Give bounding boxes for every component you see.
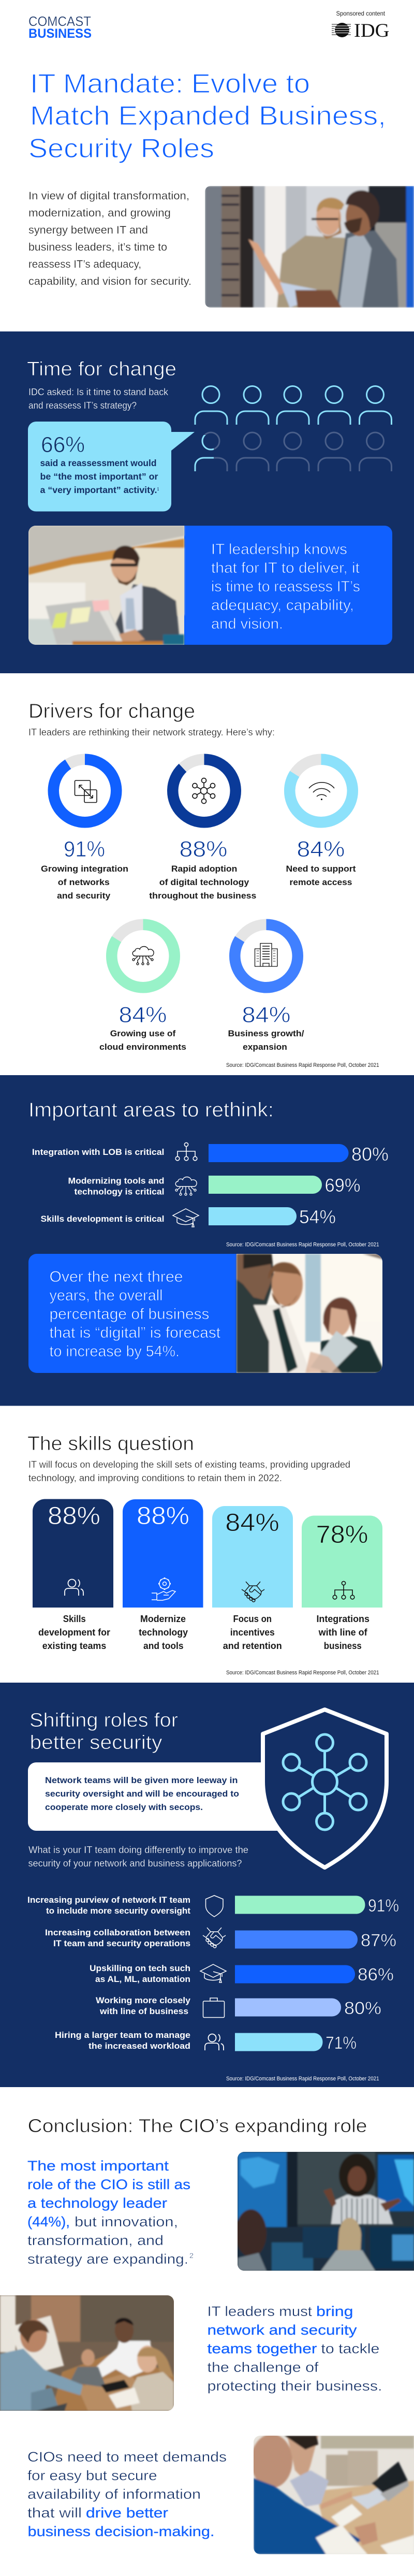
- bar row: skills: [40, 1206, 336, 1227]
- column: 78% integrations: 78%: [316, 1521, 368, 1549]
- donut: 84% cloud: [99, 924, 186, 1052]
- bar row: modernizing tools: technology is critical: [75, 1188, 165, 1197]
- title: Match Expanded Business,: [30, 101, 386, 131]
- column: 88% skills development: development for: [38, 1627, 110, 1638]
- photo: team handshake at meeting: [0, 2295, 174, 2411]
- banner text: is time to reassess IT’s: [211, 578, 360, 595]
- text block: bring teams together: teams together: [207, 2341, 317, 2356]
- column: 88% modernize: Modernize: [140, 1614, 186, 1624]
- callout: 66%: said a reassessment would: [40, 458, 156, 468]
- value: 84%: [119, 1003, 167, 1027]
- column: 84% incentives: incentives: [230, 1627, 275, 1638]
- icon: handshake: [242, 1582, 264, 1602]
- icon: cloud network: [132, 947, 154, 965]
- bar row: 91%: [27, 1895, 399, 1917]
- subheading: IT will focus on developing the skill sets of existing teams, providing upgraded: [28, 1459, 350, 1470]
- text block: bring teams together: the challenge of: [207, 2360, 319, 2375]
- callout: 66%: a “very important” activity.: [40, 485, 157, 495]
- text block: meet demands: availability of information: [27, 2486, 201, 2502]
- section: Conclusion: [0, 2115, 414, 2554]
- text block: CIO role: [27, 2158, 194, 2267]
- title: [28, 69, 386, 164]
- callout text box: security oversight and will be encouraged to: [45, 1789, 239, 1799]
- icon: org chart: [333, 1581, 354, 1599]
- column: 88% skills development: existing teams: [42, 1641, 106, 1651]
- bar row: 87%: IT team and security operations: [53, 1939, 190, 1948]
- header: [28, 10, 389, 41]
- bar row: LOB integration: 80%: [351, 1144, 389, 1165]
- icon: graduation cap: [200, 1964, 226, 1982]
- column: 78% integrations: with line of: [318, 1627, 368, 1638]
- label: [149, 864, 256, 901]
- icon: shield with network: [263, 1710, 387, 1868]
- column: 88% modernize: [123, 1499, 203, 1651]
- banner text: adequacy, capability,: [211, 597, 354, 614]
- banner text: and vision.: [211, 616, 283, 632]
- intro text: reassess IT’s adequacy,: [28, 258, 141, 270]
- donut: 91% integration: [41, 759, 128, 901]
- icon: handshake: [203, 1928, 226, 1948]
- bar row: 71%: 71%: [326, 2033, 357, 2053]
- photo: man at laptop: [28, 526, 184, 645]
- banner text: IT leadership knows: [211, 541, 347, 558]
- section: Shifting roles for better security: [0, 1683, 414, 2087]
- text block: CIO role: The most important: [27, 2158, 169, 2174]
- heading: The skills question: [27, 1433, 194, 1455]
- callout text box: cooperate more closely with secops.: [45, 1803, 203, 1812]
- text block: meet demands: CIOs need to meet demands: [27, 2449, 227, 2465]
- question text: What is your IT team doing differently to improve the: [28, 1845, 248, 1855]
- text block: CIO role: (44%),: [27, 2214, 70, 2230]
- text block: CIO role: a technology leader: [27, 2195, 167, 2211]
- column: 78% integrations: business: [324, 1641, 362, 1651]
- label: Growing use of: [110, 1029, 176, 1038]
- icon: briefcase: [203, 1998, 225, 2018]
- source note: Source: IDG/Comcast Business Rapid Response Poll, October 2021: [226, 2076, 379, 2082]
- text block: meet demands: business decision-making.: [28, 2524, 214, 2539]
- bar row: modernizing tools: [68, 1175, 360, 1197]
- icon: shield: [206, 1895, 223, 1917]
- bar row: 91%: 91%: [368, 1896, 399, 1916]
- bar row: 86%: Upskilling on tech such: [90, 1964, 190, 1973]
- column: 88% skills development: Skills: [63, 1614, 86, 1624]
- logo: IDG: IDG: [354, 20, 389, 41]
- intro text: modernization, and growing: [28, 207, 171, 219]
- blue banner with photo: [28, 1254, 382, 1373]
- label: throughout the business: [149, 891, 256, 901]
- label: Need to support: [286, 864, 356, 874]
- callout text box: Network teams will be given more leeway in: [45, 1776, 238, 1785]
- column: 78% integrations: Integrations: [316, 1614, 369, 1624]
- column: 84% incentives: [212, 1506, 293, 1651]
- question text: security of your network and business applications?: [28, 1858, 242, 1869]
- column: 88% skills development: 88%: [48, 1502, 100, 1530]
- navy background: [0, 1683, 414, 2087]
- label: of networks: [58, 878, 110, 887]
- callout: 66%: 66%: [41, 432, 85, 457]
- title: Security Roles: [28, 134, 214, 164]
- label: expansion: [243, 1043, 287, 1052]
- donut: 88% digital technology: [149, 759, 256, 901]
- section: Important areas to rethink: [0, 1075, 414, 1406]
- text block: bring teams together: network and security: [207, 2322, 357, 2338]
- heading: Important areas to rethink:: [28, 1099, 274, 1121]
- banner text: [211, 541, 360, 632]
- banner text: [50, 1268, 221, 1360]
- intro text: [28, 190, 191, 287]
- bar row: 87%: Increasing collaboration between: [45, 1928, 190, 1937]
- text block: CIO role: but innovation,: [75, 2214, 178, 2230]
- question text: and reassess IT’s strategy?: [28, 400, 137, 411]
- photo: two engineers at server rack: [205, 186, 414, 308]
- heading: Shifting roles for: [29, 1710, 178, 1731]
- navy background: [0, 331, 414, 673]
- value: 84%: [297, 837, 345, 862]
- bar row: 87%: 87%: [361, 1931, 396, 1950]
- bar row: 87%: [45, 1928, 396, 1950]
- text block: meet demands: [27, 2449, 227, 2539]
- label: [99, 1029, 186, 1052]
- callout: 66%: be “the most important” or: [40, 471, 158, 482]
- bar row: 80%: [96, 1996, 381, 2018]
- blue banner with photo: [28, 526, 392, 645]
- bar row: LOB integration: Integration with LOB is critical: [32, 1148, 165, 1157]
- donut: 84% remote access: [286, 759, 356, 887]
- icon: org chart: [175, 1142, 197, 1161]
- subheading: [28, 1459, 350, 1483]
- column: 88% modernize: and tools: [143, 1641, 184, 1651]
- banner text: percentage of business: [50, 1306, 209, 1323]
- bar row: 86%: as AL, ML, automation: [95, 1975, 190, 1984]
- icon: graduation cap: [173, 1209, 199, 1227]
- subheading: IT leaders are rethinking their network strategy. Here’s why:: [28, 727, 275, 737]
- label: and security: [57, 891, 111, 901]
- icon: cloud network: [175, 1177, 197, 1195]
- label: Growing integration: [41, 864, 128, 874]
- question text: IDC asked: Is it time to stand back: [28, 387, 169, 397]
- photo: presenter in control room: [235, 2152, 414, 2271]
- text block: bring teams together: [207, 2304, 382, 2394]
- column: 84% incentives: and retention: [223, 1641, 282, 1651]
- intro text: business leaders, it’s time to: [28, 241, 167, 253]
- banner text: that for IT to deliver, it: [211, 560, 360, 576]
- heading: Drivers for change: [28, 700, 195, 722]
- logo: IDG: [332, 20, 389, 41]
- label: [286, 864, 356, 887]
- photo: colleagues reviewing tablet and laptop: [251, 2434, 414, 2554]
- bar row: skills: Skills development is critical: [40, 1214, 165, 1224]
- icon: office building: [255, 944, 277, 966]
- text block: bring teams together: protecting their business.: [207, 2378, 382, 2394]
- label: Rapid adoption: [171, 864, 237, 874]
- icon: people: [205, 2034, 224, 2050]
- logo: Comcast Business: COMCAST: [28, 13, 91, 29]
- question text: [28, 1845, 248, 1869]
- icon: people: [65, 1580, 83, 1596]
- intro text: In view of digital transformation,: [28, 190, 189, 202]
- column: 84% incentives: 84%: [225, 1509, 279, 1537]
- text block: CIO role: role of the CIO is still as: [27, 2177, 190, 2192]
- text block: CIO role: transformation, and: [27, 2233, 164, 2248]
- text block: bring teams together: to tackle: [321, 2341, 379, 2356]
- source note: Source: IDG/Comcast Business Rapid Response Poll, October 2021: [226, 1242, 379, 1248]
- bar row: 86%: 86%: [358, 1965, 394, 1985]
- photo: three colleagues with tablet: [236, 1254, 382, 1373]
- source note: Source: IDG/Comcast Business Rapid Response Poll, October 2021: [226, 1670, 379, 1676]
- text block: meet demands: drive better: [86, 2505, 168, 2521]
- label: remote access: [290, 878, 352, 887]
- pictogram: 6.6 of 10 people: [195, 386, 391, 471]
- column: 84% incentives: Focus on: [233, 1614, 272, 1624]
- label: [41, 864, 128, 901]
- logo: Comcast Business: BUSINESS: [28, 26, 92, 41]
- section: The skills question: [27, 1433, 382, 1676]
- icon: network nodes: [193, 778, 215, 804]
- title: IT Mandate: Evolve to: [30, 69, 310, 99]
- column: 88% modernize: technology: [139, 1627, 188, 1638]
- sponsored content label: Sponsored content: [336, 10, 386, 17]
- icon: resize squares: [75, 780, 97, 803]
- bar row: 71%: the increased workload: [88, 2042, 190, 2051]
- logo: Comcast Business: [28, 13, 92, 41]
- intro text: synergy between IT and: [28, 224, 148, 236]
- bar row: skills: 54%: [299, 1206, 336, 1227]
- text block: CIO role: strategy are expanding.: [27, 2251, 188, 2267]
- bar row: 86%: [90, 1964, 394, 1985]
- label: [228, 1029, 304, 1052]
- bar row: modernizing tools: 69%: [325, 1175, 360, 1196]
- text block: meet demands: that will: [27, 2505, 82, 2521]
- bar row: LOB integration: [32, 1142, 389, 1165]
- text block: bring teams together: bring: [316, 2304, 353, 2319]
- column: 88% skills development: [33, 1499, 113, 1651]
- icon: wifi: [309, 783, 334, 800]
- heading: Conclusion: The CIO’s expanding role: [28, 2115, 367, 2136]
- callout: 66%: 1: [157, 487, 159, 491]
- column: 78% integrations: [302, 1515, 382, 1651]
- label: of digital technology: [159, 878, 249, 887]
- text block: CIO role: 2: [189, 2251, 194, 2260]
- bar row: 80%: with line of business: [99, 2007, 188, 2016]
- callout: 66%: [28, 422, 195, 512]
- value: 84%: [242, 1003, 291, 1027]
- text block: bring teams together: IT leaders must: [207, 2304, 313, 2319]
- section: Time for change: [0, 331, 414, 673]
- bar row: modernizing tools: Modernizing tools and: [68, 1177, 165, 1186]
- banner text: years, the overall: [50, 1287, 162, 1304]
- bar row: 71%: [55, 2031, 357, 2053]
- bar row: 91%: to include more security oversight: [46, 1906, 191, 1916]
- bar row: 71%: Hiring a larger team to manage: [55, 2031, 190, 2040]
- value: 88%: [179, 837, 228, 862]
- navy background: [0, 1075, 414, 1406]
- bar row: 80%: 80%: [344, 1999, 381, 2018]
- heading: better security: [30, 1732, 162, 1754]
- label: Business growth/: [228, 1029, 304, 1038]
- banner text: Over the next three: [50, 1268, 183, 1285]
- text block: meet demands: for easy but secure: [27, 2468, 157, 2483]
- callout text box: [28, 1762, 290, 1831]
- bar row: 91%: Increasing purview of network IT team: [27, 1895, 190, 1905]
- icon: gear in hand: [152, 1578, 175, 1600]
- banner text: to increase by 54%.: [50, 1343, 180, 1360]
- bar row: 80%: Working more closely: [96, 1996, 191, 2005]
- banner text: that is “digital” is forecast: [50, 1324, 221, 1341]
- subheading: technology, and improving conditions to retain them in 2022.: [28, 1472, 282, 1483]
- source note: Source: IDG/Comcast Business Rapid Response Poll, October 2021: [226, 1062, 379, 1068]
- heading: [29, 1710, 178, 1754]
- column: 88% modernize: 88%: [137, 1502, 189, 1530]
- question text: [28, 387, 169, 411]
- label: cloud environments: [99, 1043, 186, 1052]
- donut: 84% growth: [228, 924, 304, 1052]
- section: Drivers for change: [28, 700, 379, 1068]
- value: 91%: [64, 837, 105, 862]
- heading: Time for change: [27, 358, 176, 380]
- intro text: capability, and vision for security.: [28, 276, 191, 287]
